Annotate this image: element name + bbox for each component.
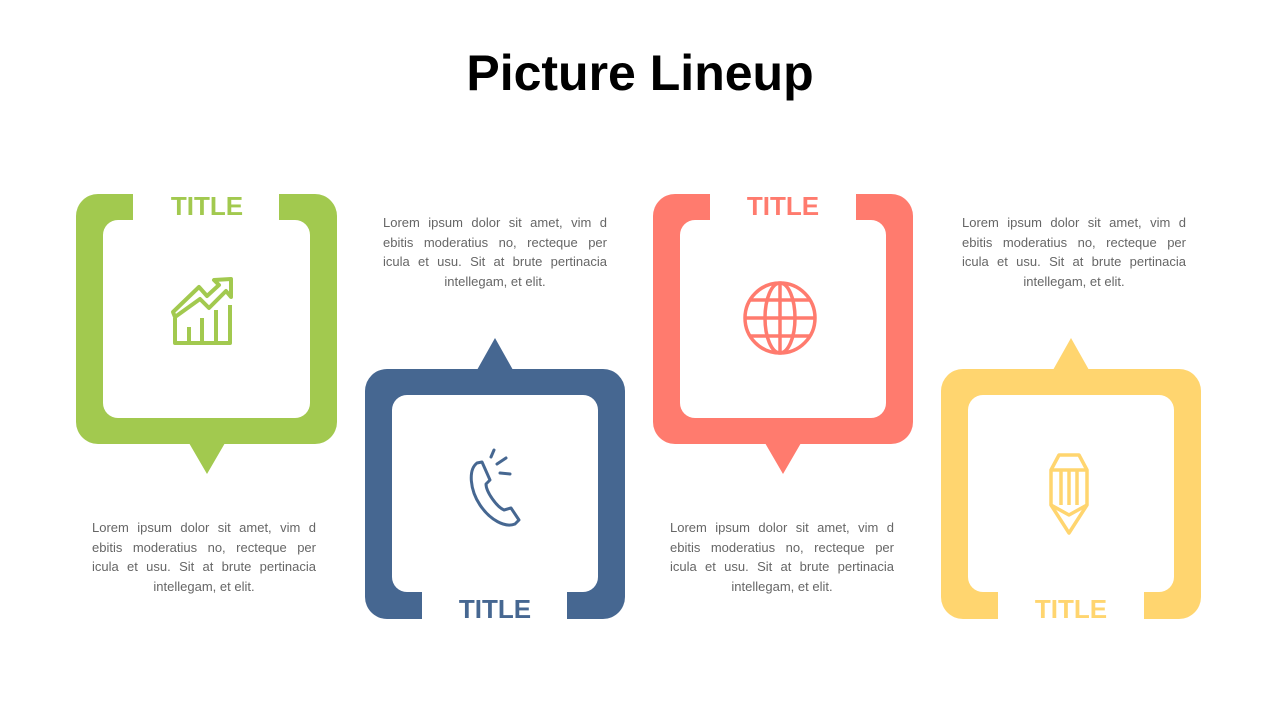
text: blue: ebitis moderatius no, recteque per bbox=[383, 234, 607, 250]
text: green: icula et usu. Sit at brute pertinacia bbox=[92, 559, 316, 574]
text: green bbox=[92, 520, 316, 594]
title: Picture Lineup bbox=[466, 45, 814, 101]
text: yellow: intellegam, et elit. bbox=[1023, 274, 1125, 288]
icon: pencil bbox=[1051, 455, 1087, 533]
text: blue bbox=[383, 215, 607, 288]
icon: phone bbox=[471, 450, 519, 525]
icon: chart bbox=[173, 279, 231, 343]
text: blue: intellegam, et elit. bbox=[444, 274, 546, 288]
panel: red bbox=[653, 190, 913, 474]
text: green: ebitis moderatius no, recteque per bbox=[92, 540, 316, 554]
text: blue: Lorem ipsum dolor sit amet, vim d bbox=[383, 215, 607, 230]
text: red: Lorem ipsum dolor sit amet, vim d bbox=[670, 520, 894, 535]
panel: yellow: TITLE bbox=[1035, 594, 1107, 624]
panel: blue: TITLE bbox=[459, 594, 531, 624]
text: yellow: icula et usu. Sit at brute pertinacia bbox=[962, 254, 1186, 269]
text: blue: icula et usu. Sit at brute pertinacia bbox=[383, 254, 607, 269]
text: red: intellegam, et elit. bbox=[731, 578, 833, 594]
panel: blue bbox=[365, 338, 625, 624]
panel: yellow bbox=[941, 338, 1201, 624]
panel: green: TITLE bbox=[171, 191, 243, 221]
text: green: Lorem ipsum dolor sit amet, vim d bbox=[92, 520, 316, 535]
text: red: ebitis moderatius no, recteque per bbox=[670, 540, 894, 554]
text: yellow: ebitis moderatius no, recteque per bbox=[962, 234, 1186, 250]
text: yellow: Lorem ipsum dolor sit amet, vim d bbox=[962, 215, 1186, 230]
panel: green bbox=[76, 190, 337, 474]
text: yellow bbox=[962, 215, 1186, 288]
text: green: intellegam, et elit. bbox=[153, 578, 255, 594]
text: red: icula et usu. Sit at brute pertinacia bbox=[670, 559, 894, 574]
text: red bbox=[670, 520, 894, 594]
panel: red: TITLE bbox=[747, 191, 819, 221]
icon: globe bbox=[745, 283, 815, 353]
